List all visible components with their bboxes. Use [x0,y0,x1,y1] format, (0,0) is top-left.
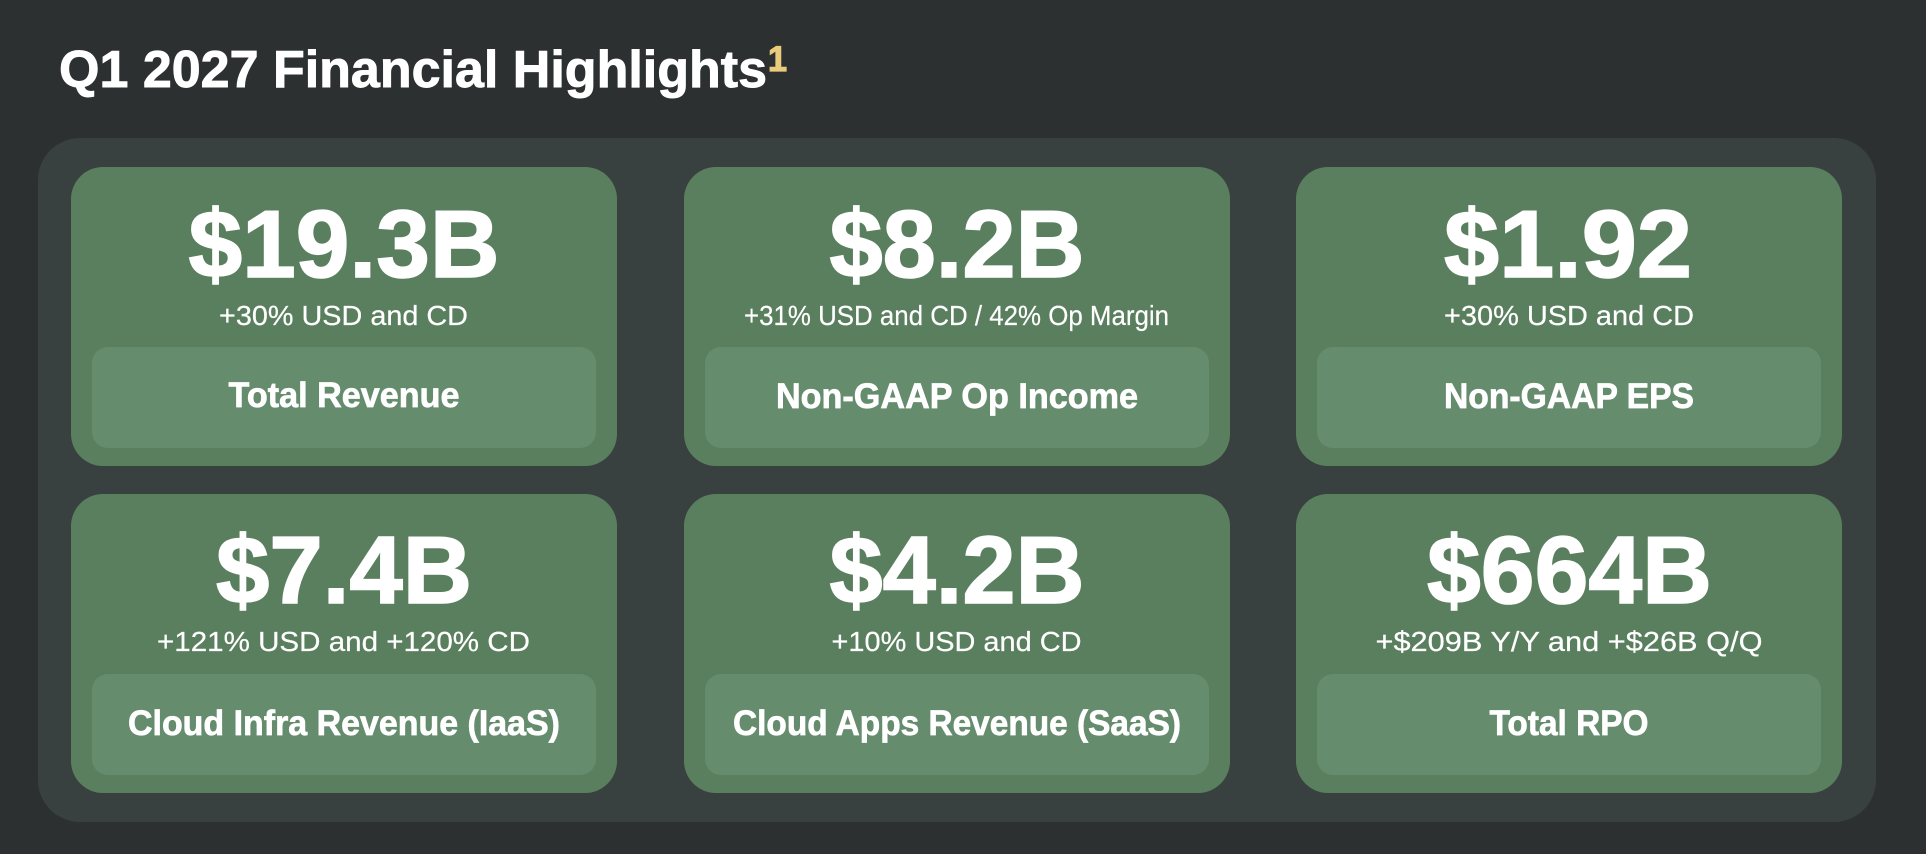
growth: non-gaap eps: +30% USD and CD [1444,300,1694,331]
card: non-gaap op income [684,167,1230,466]
label box: non-gaap op income [705,347,1209,448]
label box: total revenue [92,347,596,448]
panel: highlights [38,138,1876,822]
card: total rpo [1296,494,1842,793]
label box: non-gaap op income: Non-GAAP Op Income [776,377,1138,416]
card: non-gaap eps [1296,167,1842,466]
label box: cloud infra revenue [92,674,596,775]
label box: non-gaap eps [1317,347,1821,448]
value: non-gaap eps: $1.92 [1444,191,1692,298]
card: cloud apps revenue [684,494,1230,793]
value: total revenue: $19.3B [188,191,500,298]
label box: cloud infra revenue: Cloud Infra Revenue (IaaS) [128,704,560,743]
label box: total revenue: Total Revenue [228,376,460,415]
card: cloud infra revenue [71,494,617,793]
growth: cloud infra revenue: +121% USD and +120% CD [157,626,530,657]
growth: non-gaap op income: +31% USD and CD / 42% Op Margin [744,300,1169,331]
growth: total revenue: +30% USD and CD [219,300,468,331]
value: non-gaap op income: $8.2B [830,191,1084,298]
label box: total rpo: Total RPO [1490,704,1648,743]
label box: total rpo [1317,674,1821,775]
label box: cloud apps revenue [705,674,1209,775]
value: total rpo: $664B [1427,517,1712,624]
label box: non-gaap eps: Non-GAAP EPS [1444,377,1694,416]
growth: cloud apps revenue: +10% USD and CD [832,626,1082,657]
growth: total rpo: +$209B Y/Y and +$26B Q/Q [1376,626,1762,657]
value: cloud apps revenue: $4.2B [830,517,1084,624]
value: cloud infra revenue: $7.4B [216,517,472,624]
footnote marker: 1 [768,40,787,79]
label box: cloud apps revenue: Cloud Apps Revenue (SaaS) [733,704,1181,743]
card: total revenue [71,167,617,466]
title: Q1 2027 Financial Highlights [59,41,767,99]
